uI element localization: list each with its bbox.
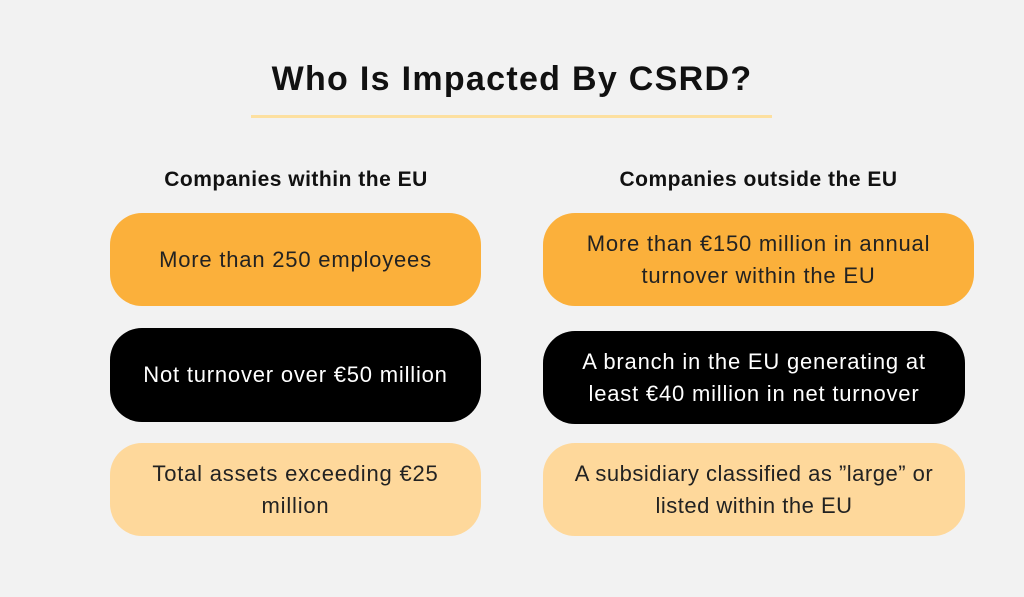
- heading: within EU: Companies within the EU: [164, 168, 428, 191]
- box: branch: [543, 331, 965, 424]
- title: Who Is Impacted By CSRD?: [272, 60, 752, 98]
- box: branch: A branch in the EU generating at least €40 million in net turnover: [582, 348, 926, 406]
- box: assets: Total assets exceeding €25 million: [152, 460, 439, 518]
- box: subsidiary: A subsidiary classified as ”large” or listed within the EU: [575, 460, 933, 518]
- box: annual turnover: [543, 213, 974, 306]
- heading: outside EU: Companies outside the EU: [619, 168, 898, 191]
- box: turnover: Not turnover over €50 million: [143, 362, 448, 387]
- box: subsidiary: [543, 443, 965, 536]
- box: employees: More than 250 employees: [159, 246, 432, 272]
- box: assets: [110, 443, 481, 536]
- box: annual turnover: More than €150 million in annual turnover within the EU: [587, 230, 930, 288]
- box: employees: [110, 213, 481, 306]
- box: turnover: [110, 328, 481, 422]
